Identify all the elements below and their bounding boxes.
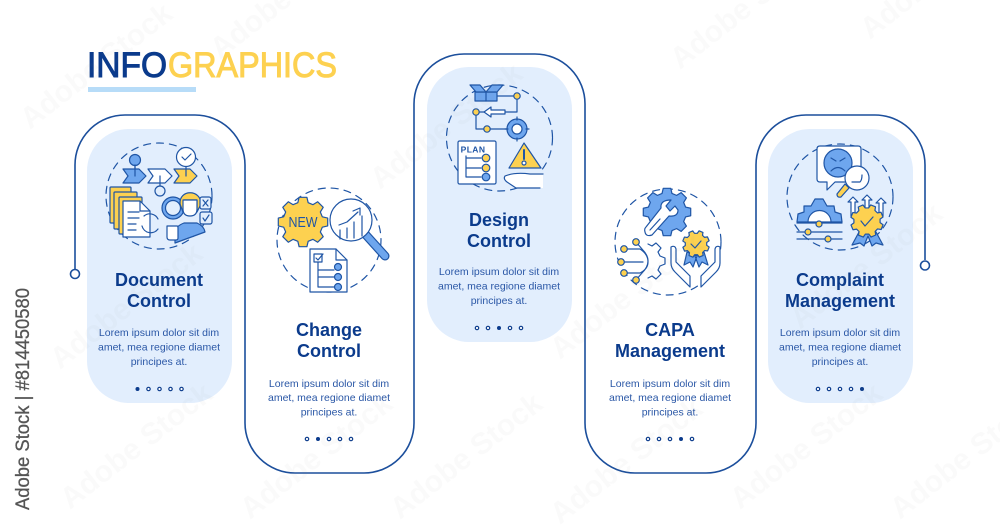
icon: CAPA management: [615, 188, 721, 295]
text block: principes at.: [471, 295, 527, 307]
text: Adobe Stock: [544, 226, 709, 366]
pagination dots: [305, 437, 353, 441]
text: Adobe Stock: [784, 196, 949, 336]
title: [87, 46, 337, 92]
text: Adobe Stock: [364, 56, 529, 196]
heading: Control: [297, 341, 361, 361]
text block: amet, mea regione diamet: [779, 342, 901, 354]
text: Adobe Stock: [234, 386, 399, 526]
panel: Change Control: [268, 188, 390, 441]
icon: design control: [446, 85, 552, 191]
pagination dots: [816, 387, 864, 391]
icon: design control: PLAN: [461, 144, 485, 154]
pagination dots: [475, 326, 523, 330]
icon: complaint management: [787, 144, 893, 250]
panel: CAPA Management: [609, 188, 731, 441]
text block: amet, mea regione diamet: [609, 392, 731, 404]
heading: Control: [467, 231, 531, 251]
text: Adobe Stock: [44, 236, 209, 376]
text: Adobe Stock: [14, 0, 179, 136]
text: Adobe Stock: [724, 376, 889, 516]
text: Adobe Stock: [384, 386, 549, 526]
text block: Lorem ipsum dolor sit dim: [269, 378, 389, 390]
heading: Management: [785, 291, 895, 311]
heading: Design: [469, 210, 529, 230]
text block: Lorem ipsum dolor sit dim: [99, 327, 219, 339]
text block: Lorem ipsum dolor sit dim: [439, 266, 559, 278]
text: Adobe Stock: [54, 376, 219, 516]
text block: principes at.: [301, 406, 357, 418]
heading: Complaint: [796, 270, 884, 290]
heading: Management: [615, 341, 725, 361]
panel: Document Control: [87, 129, 232, 403]
title: INFO: [87, 46, 167, 85]
panel: Complaint Management: [768, 129, 913, 403]
text block: amet, mea regione diamet: [438, 280, 560, 292]
connecting outline: [70, 54, 930, 473]
pagination dots: [646, 437, 694, 441]
heading: CAPA: [645, 320, 695, 340]
text block: principes at.: [131, 356, 187, 368]
title: GRAPHICS: [168, 46, 337, 85]
icon: change control: [277, 188, 385, 292]
heading: Change: [296, 320, 362, 340]
text block: principes at.: [642, 406, 698, 418]
icon: change control: NEW: [288, 215, 318, 231]
pagination dots: [136, 387, 183, 391]
heading: Document: [115, 270, 203, 290]
text block: Lorem ipsum dolor sit dim: [780, 327, 900, 339]
text block: amet, mea regione diamet: [98, 342, 220, 354]
text block: amet, mea regione diamet: [268, 392, 390, 404]
stock id label: Adobe Stock | #814450580: [13, 288, 34, 510]
heading: Control: [127, 291, 191, 311]
text block: Lorem ipsum dolor sit dim: [610, 378, 730, 390]
panel: Design Control: [427, 67, 572, 342]
text block: principes at.: [812, 356, 868, 368]
icon: document control: [106, 143, 212, 249]
